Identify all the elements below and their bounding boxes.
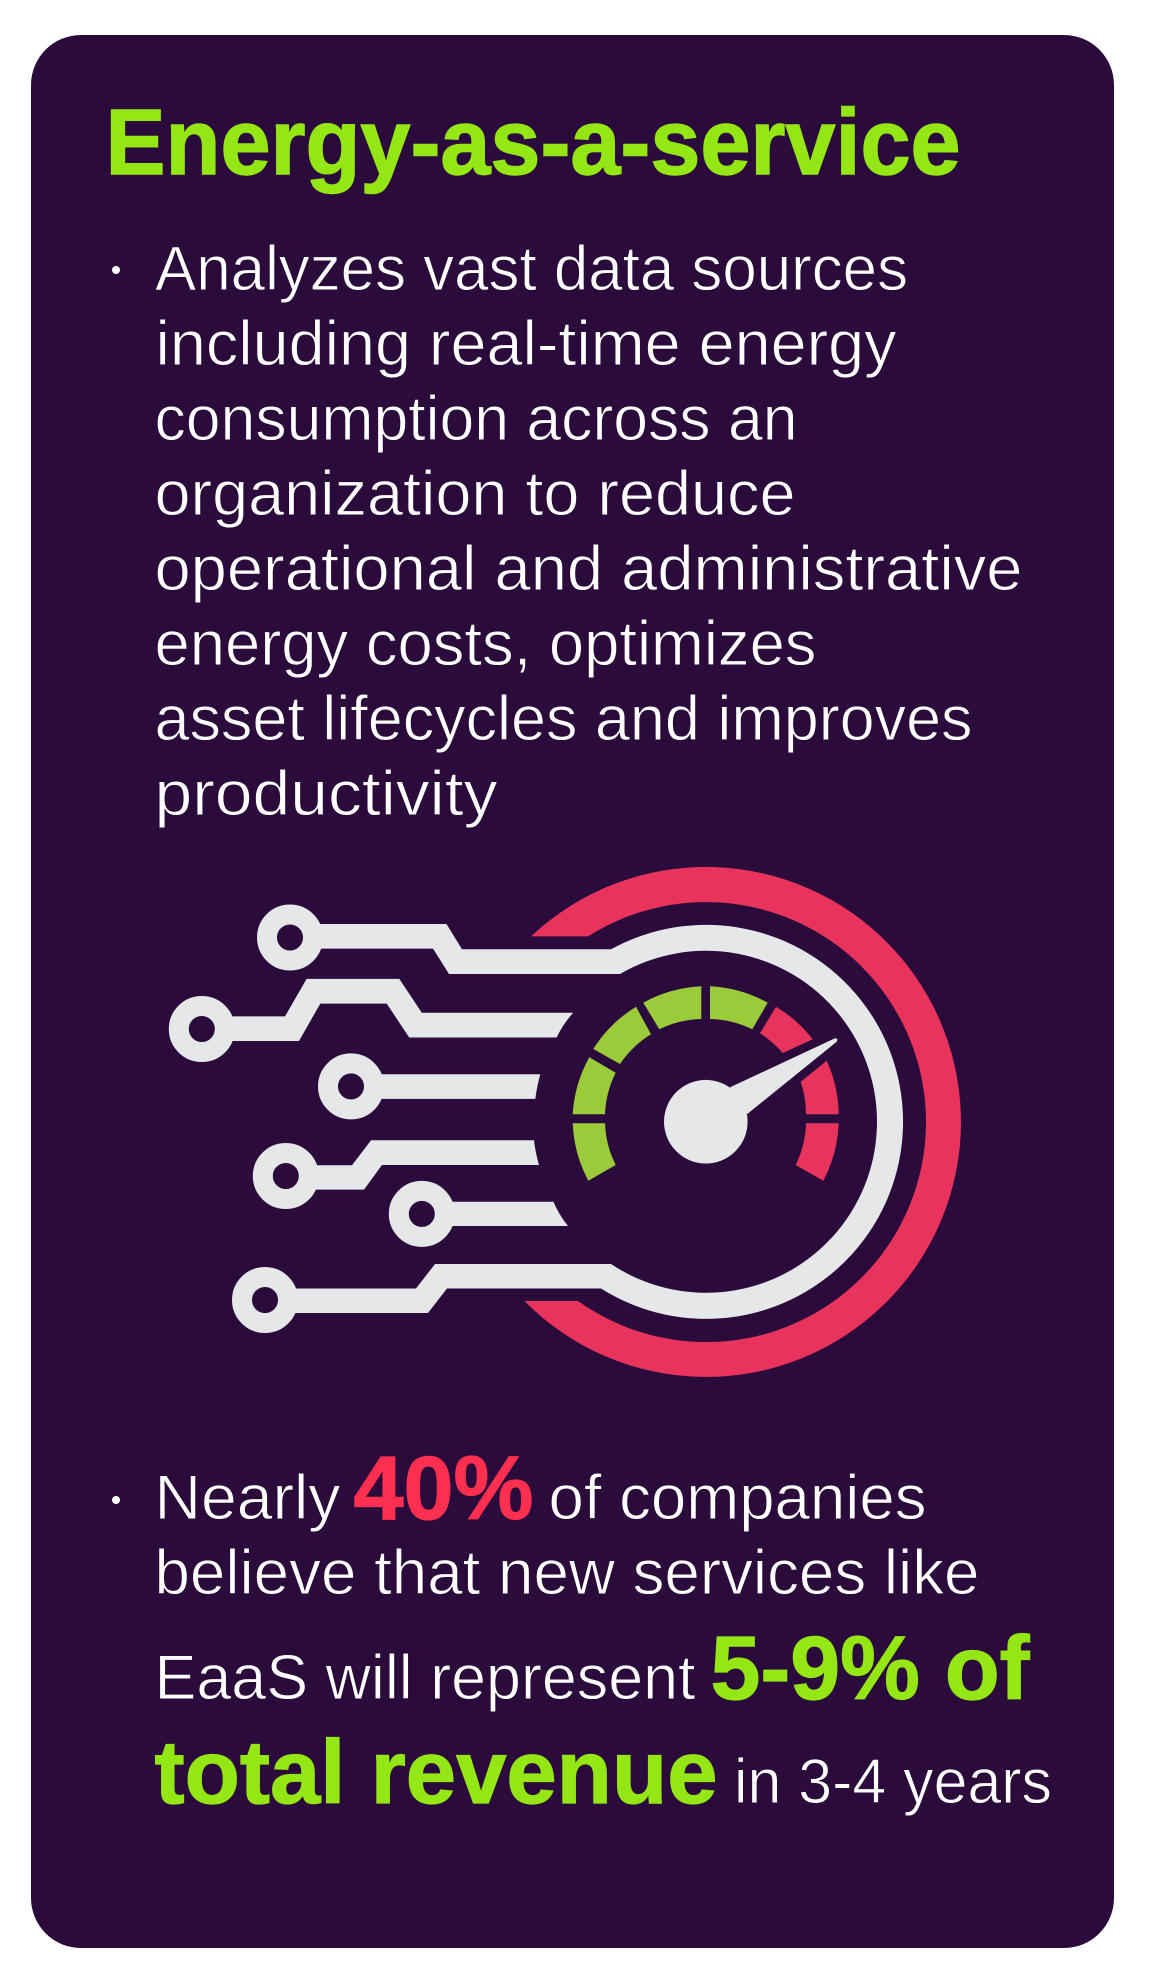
- bullet dot: second point: [112, 1496, 120, 1504]
- text block: first bullet: [154, 234, 1023, 829]
- stat: 40%: 40%: [354, 1439, 534, 1539]
- grey dial ring with top and bottom traces: [290, 924, 903, 1319]
- title: Energy-as-a-service: [106, 90, 960, 194]
- outer pink arc: [524, 867, 961, 1377]
- bullet dot: first point: [112, 266, 120, 274]
- gauge: pink segments: [760, 1007, 839, 1181]
- text block: second bullet: [154, 1439, 1052, 1823]
- text block: first bullet: organization to reduce: [154, 459, 796, 529]
- gauge needle: [664, 1038, 837, 1163]
- circuit trace 6 terminal: [242, 1277, 288, 1323]
- icon: speedometer with circuit traces: [179, 867, 961, 1377]
- text block: first bullet: Analyzes vast data sources: [155, 234, 908, 304]
- text block: second bullet: EaaS will represent: [154, 1643, 696, 1713]
- text block: first bullet: asset lifecycles and improves: [154, 684, 972, 754]
- text block: first bullet: energy costs, optimizes: [154, 609, 816, 679]
- circuit trace 1 terminal: [267, 914, 313, 960]
- text block: second bullet: of companies: [548, 1463, 926, 1533]
- text block: first bullet: consumption across an: [154, 384, 798, 454]
- gauge: green segments: [573, 986, 768, 1181]
- text block: first bullet: including real-time energy: [156, 309, 897, 379]
- circuit trace 2: [179, 979, 573, 1052]
- stat: 5-9% of total revenue: [154, 1619, 1031, 1823]
- text block: first bullet: operational and administrative: [154, 534, 1023, 604]
- stat: 5-9% of total revenue: total revenue: [154, 1723, 718, 1823]
- circuit trace 4: [263, 1140, 539, 1199]
- circuit trace 3: [328, 1063, 540, 1109]
- text block: first bullet: productivity: [154, 759, 498, 829]
- stat: 5-9% of total revenue: 5-9% of: [710, 1619, 1031, 1719]
- text block: second bullet: in 3-4 years: [734, 1747, 1052, 1817]
- text block: second bullet: believe that new services like: [154, 1538, 980, 1608]
- text block: second bullet: Nearly: [154, 1463, 341, 1533]
- circuit trace 5: [399, 1191, 568, 1237]
